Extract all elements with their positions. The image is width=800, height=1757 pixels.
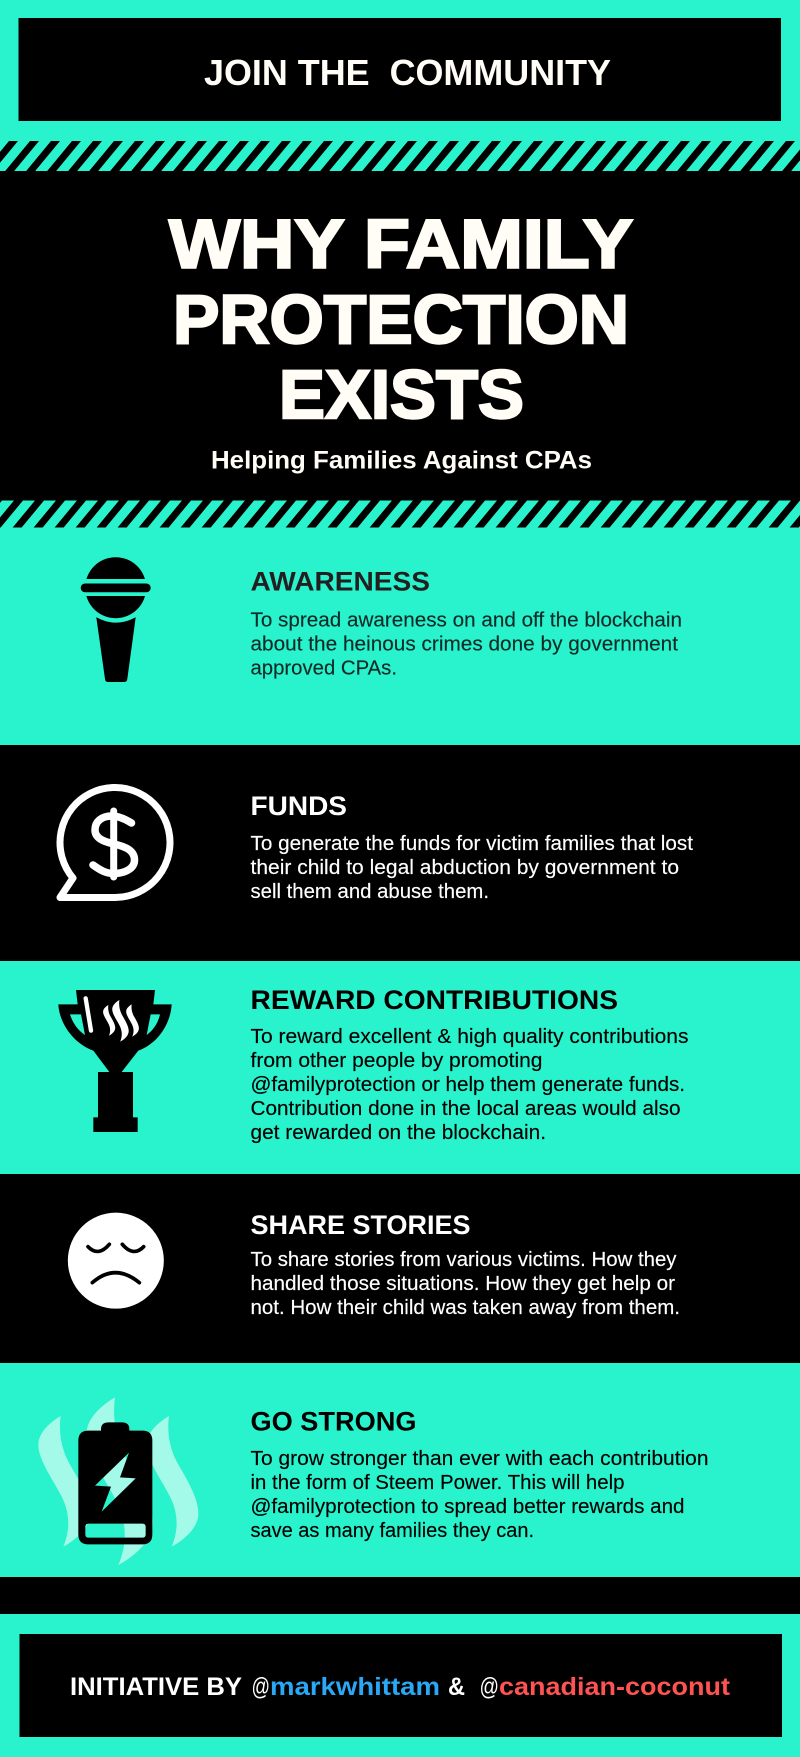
text: go strong body: in the form of Steem Power. This will help xyxy=(250,1471,624,1494)
text: funds body: To generate the funds for victim families that lost xyxy=(250,832,693,855)
heading: go strong: GO STRONG xyxy=(250,1407,416,1437)
text: initiative credits xyxy=(70,1673,731,1701)
text: funds body: their child to legal abduction by government to xyxy=(250,856,679,879)
text: reward body: @familyprotection or help them generate funds. xyxy=(250,1073,685,1096)
title: PROTECTION xyxy=(173,281,629,358)
text: initiative credits: @ xyxy=(480,1673,499,1701)
text: funds body: sell them and abuse them. xyxy=(250,880,489,903)
text: go strong body: @familyprotection to spread better rewards and xyxy=(250,1495,684,1518)
icon: sad face xyxy=(68,1213,164,1309)
text: share stories body: To share stories from various victims. How they xyxy=(250,1248,677,1271)
text: initiative credits: & xyxy=(448,1673,465,1701)
panel: go strong xyxy=(0,1363,800,1577)
text: go strong body: save as many families they can. xyxy=(250,1519,534,1542)
text: initiative credits: canadian-coconut xyxy=(499,1673,731,1701)
text: reward body: To reward excellent & high quality contributions xyxy=(250,1025,688,1048)
panel: title block xyxy=(0,141,800,528)
panel: funds xyxy=(0,745,800,961)
panel: black separator band xyxy=(0,1577,800,1614)
panel: initiative footer xyxy=(0,1614,800,1757)
text: share stories body: not. How their child was taken away from them. xyxy=(250,1296,680,1319)
panel: share stories xyxy=(0,1174,800,1363)
text: awareness body: about the heinous crimes done by government xyxy=(250,632,678,656)
text: reward body: Contribution done in the local areas would also xyxy=(250,1097,680,1120)
subtitle: Helping Families Against CPAs xyxy=(211,446,592,474)
icon: dollar speech bubble xyxy=(60,788,170,898)
heading: reward contributions: REWARD CONTRIBUTIONS xyxy=(250,985,618,1015)
text: reward body: get rewarded on the blockchain. xyxy=(250,1121,546,1144)
text: go strong body xyxy=(250,1447,708,1542)
text: awareness body: To spread awareness on and off the blockchain xyxy=(250,608,682,632)
title xyxy=(169,206,633,433)
text: funds body xyxy=(250,832,693,903)
text: initiative credits: @ xyxy=(252,1673,270,1701)
panel: join the community banner xyxy=(0,0,800,141)
icon: battery with steem logo xyxy=(38,1397,198,1565)
icon: trophy with steem logo xyxy=(58,990,172,1132)
text: share stories body xyxy=(250,1248,680,1319)
heading: join the community: JOIN THE COMMUNITY xyxy=(204,52,611,93)
text: reward body: from other people by promoting xyxy=(250,1049,542,1072)
text: awareness body xyxy=(250,608,682,680)
heading: awareness: AWARENESS xyxy=(250,567,430,597)
heading: share stories: SHARE STORIES xyxy=(250,1210,470,1240)
text: initiative credits: markwhittam xyxy=(270,1673,440,1701)
title: EXISTS xyxy=(279,356,524,433)
panel: reward contributions xyxy=(0,961,800,1174)
heading: funds: FUNDS xyxy=(250,791,347,821)
text: go strong body: To grow stronger than ever with each contribution xyxy=(250,1447,708,1470)
text: reward body xyxy=(250,1025,688,1144)
text: share stories body: handled those situations. How they get help or xyxy=(250,1272,675,1295)
panel: awareness xyxy=(0,528,800,745)
title: WHY FAMILY xyxy=(169,206,633,282)
icon: microphone xyxy=(70,557,162,682)
text: awareness body: approved CPAs. xyxy=(250,656,397,680)
text: initiative credits: INITIATIVE BY xyxy=(70,1673,242,1701)
